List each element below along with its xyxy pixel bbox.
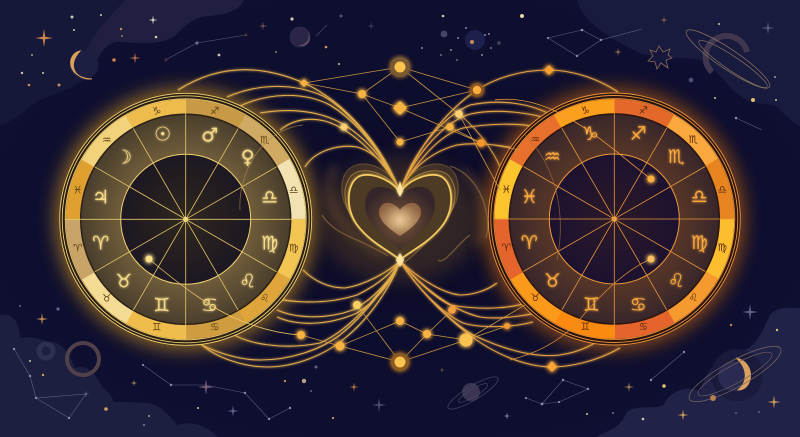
sign glyphs: ♑︎ — [582, 123, 599, 145]
outer rings — [60, 93, 312, 345]
planet and sign glyphs: ♉︎ — [115, 270, 132, 292]
cloud: top left — [0, 0, 244, 125]
planet and sign glyphs: ♂︎ — [201, 124, 218, 146]
cloud: top right — [577, 0, 800, 126]
outer band segments — [461, 65, 768, 373]
icon: small moon top — [290, 26, 310, 48]
icon: star cluster — [421, 27, 501, 61]
band glyphs: ♈︎ — [73, 242, 82, 254]
icon: crescent moon top left — [70, 50, 98, 80]
swirling wisps around heart — [329, 165, 486, 255]
glow: left wheel — [55, 88, 317, 350]
band glyphs — [73, 105, 298, 333]
band glyphs: ♌︎ — [260, 292, 269, 304]
sign glyphs: ♐︎ — [630, 123, 647, 145]
planet and sign glyphs: ♃︎ — [92, 186, 109, 208]
band glyphs: ♍︎ — [718, 242, 727, 254]
sign glyphs: ♉︎ — [544, 270, 561, 292]
swirl strokes — [322, 166, 488, 262]
band glyphs: ♎︎ — [718, 184, 727, 196]
sign glyphs: ♋︎ — [630, 294, 647, 316]
sign glyphs: ♈︎ — [521, 232, 538, 254]
outer band segments — [32, 66, 339, 373]
glow: heart aura — [320, 158, 480, 282]
band glyphs: ♈︎ — [502, 242, 511, 254]
spokes — [494, 99, 734, 339]
sign glyphs: ♒︎ — [544, 146, 561, 168]
band glyphs: ♊︎ — [581, 321, 590, 333]
glow: right wheel — [483, 88, 745, 350]
network lines: upper — [304, 67, 520, 190]
band glyphs: ♍︎ — [289, 242, 298, 254]
band glyphs: ♌︎ — [689, 292, 698, 304]
sign glyphs — [521, 123, 708, 316]
panel: left zodiac wheel — [32, 66, 339, 373]
band glyphs: ♐︎ — [639, 105, 648, 117]
planet and sign glyphs: ♍︎ — [261, 232, 278, 254]
outer rings — [488, 93, 740, 345]
band glyphs: ♐︎ — [210, 105, 219, 117]
cloud: bottom left — [0, 314, 218, 437]
band glyphs: ♒︎ — [102, 134, 111, 146]
band glyphs: ♑︎ — [581, 105, 590, 117]
band glyphs: ♎︎ — [289, 184, 298, 196]
band glyphs: ♉︎ — [102, 292, 111, 304]
band glyphs: ♋︎ — [210, 321, 219, 333]
band glyphs: ♏︎ — [260, 134, 270, 146]
icon: ring planet bottom left — [39, 343, 99, 375]
icon: eight point star outline — [648, 46, 672, 69]
connection arcs: lower right — [400, 261, 620, 367]
icon: ringed crescent moon bottom right — [683, 337, 787, 411]
connection arcs: upper right — [400, 70, 618, 192]
planet and sign glyphs: ☉︎ — [154, 123, 171, 145]
sign glyphs: ♊︎ — [583, 294, 600, 316]
planet and sign glyphs: ♈︎ — [92, 232, 109, 254]
sign glyphs: ♍︎ — [691, 232, 708, 254]
panel: right zodiac wheel — [461, 65, 768, 373]
sign glyphs: ♓︎ — [521, 186, 538, 208]
cloud: bottom right — [597, 308, 800, 437]
panel: central heart — [342, 164, 458, 267]
band glyphs: ♑︎ — [152, 105, 161, 117]
icon: saturn bottom — [445, 372, 501, 414]
band glyphs: ♋︎ — [639, 321, 648, 333]
band glyphs: ♏︎ — [689, 134, 699, 146]
band glyphs — [502, 105, 727, 333]
planet and sign glyphs: ♌︎ — [239, 270, 256, 292]
band glyphs: ♓︎ — [73, 184, 82, 196]
band glyphs: ♒︎ — [531, 134, 540, 146]
heart flares — [396, 181, 404, 267]
band glyphs: ♓︎ — [502, 184, 511, 196]
sign glyphs: ♎︎ — [691, 186, 708, 208]
sign glyphs: ♏︎ — [668, 146, 685, 168]
planet and sign glyphs — [92, 123, 278, 316]
spokes — [66, 99, 306, 339]
sign glyphs: ♌︎ — [668, 270, 685, 292]
connection arcs: lower left — [183, 261, 400, 367]
planet and sign glyphs: ☽︎ — [115, 146, 132, 168]
planet and sign glyphs: ♀︎ — [241, 146, 255, 168]
threads crossing wheels — [149, 99, 651, 360]
planet and sign glyphs: ♊︎ — [153, 294, 170, 316]
band glyphs: ♉︎ — [531, 292, 540, 304]
connection arcs: upper left — [178, 70, 400, 192]
planet and sign glyphs: ♎︎ — [261, 186, 278, 208]
band glyphs: ♊︎ — [152, 321, 161, 333]
planet and sign glyphs: ♋︎ — [201, 294, 218, 316]
icon: ringed planet top right — [681, 23, 775, 95]
network lines: lower — [301, 305, 525, 362]
network nodes — [146, 57, 654, 372]
